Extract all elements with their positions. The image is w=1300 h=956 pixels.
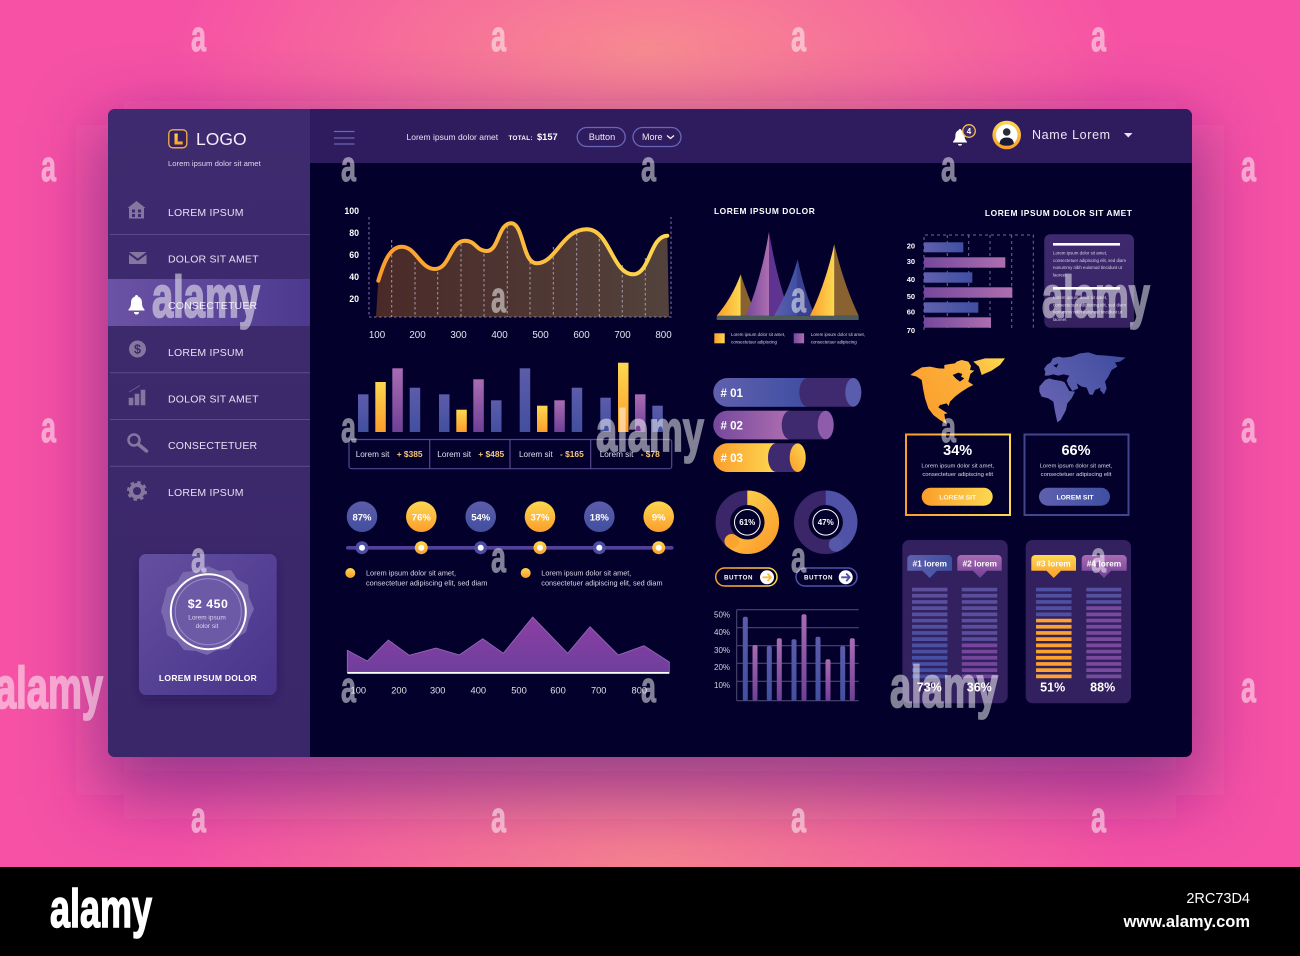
sidebar navigation: LOREM IPSUM [168,207,244,219]
percentage circles: 37% [530,512,550,524]
dashboard window [108,109,1192,757]
badge seal [161,566,254,655]
values table: - $165 [560,449,584,459]
watermarks: a [1241,403,1256,452]
watermarks: a [1091,533,1106,582]
horizontal bar chart: 50 [907,292,915,301]
percentage circles: 76% [412,512,431,524]
footer band: www.alamy.com [1122,913,1250,931]
x axis labels [369,330,672,341]
meter card left: 73% [917,680,942,694]
map: north america [910,358,1005,424]
watermarks: a [491,12,506,61]
watermarks: a [41,142,56,191]
column chart: 10% [714,681,730,690]
watermarks: a [791,793,806,842]
tag 3: #3 lorem [1036,558,1071,568]
donut chart 47% [801,498,850,552]
stat box 34%: LOREM SIT [939,494,977,501]
sidebar logo: LOGO [196,129,247,149]
icon: bar chart [129,386,145,405]
area chart: 300 [430,686,445,696]
x axis labels: 100 [369,330,386,341]
top bar [334,121,1132,149]
x axis labels: 500 [532,330,549,341]
y axis labels: 20 [349,294,359,304]
horizontal bar chart: 60 [907,308,915,317]
watermarks: a [791,12,806,61]
tag 1 [907,555,952,578]
cylinder bars [713,378,861,472]
meter card left [902,540,1008,703]
button [577,128,625,146]
stat box 34% [906,434,1010,515]
promo card [139,554,277,699]
watermarks: a [341,663,356,712]
donut chart 47%: 47% [818,518,834,527]
text card: laoreet [1053,272,1067,278]
tag 4: #4 lorem [1087,558,1121,568]
horizontal bar chart [907,235,1033,335]
y axis labels [344,206,359,304]
icon: search [128,434,146,451]
values table: + $485 [478,449,504,459]
watermarks: alamy [1042,265,1150,330]
timeline nodes [356,541,665,554]
icon: bell [128,295,144,314]
sidebar navigation [108,201,310,500]
triangle legend: consectetuer adipiscing [811,340,857,344]
stat box 34%: 34% [943,443,972,459]
watermarks: a [191,793,206,842]
meter card right [1026,540,1131,703]
cylinder 01: # 01 [720,388,743,400]
watermarks: a [941,403,956,452]
text card: consectetuer adipiscing elit, sed diam [1053,258,1126,263]
x axis labels: 300 [450,330,467,341]
heading: lorem ipsum dolor: LOREM IPSUM DOLOR [714,206,815,216]
notification bell [953,125,975,146]
y axis labels: 40 [349,272,359,282]
text card: laoreet [1053,317,1067,322]
x axis labels: 700 [614,330,631,341]
area chart: 600 [550,686,566,696]
percentage circles: 18% [590,512,609,524]
watermarks: alamy [596,399,704,464]
watermarks: a [491,793,506,842]
top bar: Lorem ipsum dolor amet [406,132,499,142]
timeline [345,501,674,588]
notification bell: 4 [967,127,972,136]
line chart [344,206,672,341]
icon: house [128,201,146,218]
sidebar navigation: LOREM IPSUM [168,487,244,499]
y axis labels: 100 [344,206,359,216]
button yellow: BUTTON [724,574,753,582]
watermarks: a [41,403,56,452]
area chart: 100 [351,686,366,696]
percentage circles: 54% [471,512,491,524]
top bar: Name Lorem [1032,128,1111,142]
triangle legend: Lorem ipsum dolor sit amet, [731,332,785,337]
meter 2 [962,588,997,678]
triangle legend: Lorem ipsum dolor sit amet, [811,332,865,337]
grouped bar chart [349,363,672,469]
triangle legend: consectetuer adipiscing [731,340,777,344]
watermarks: a [191,533,206,582]
text card: nonummy nibh euismod tincidunt ut [1053,265,1123,270]
button yellow [716,568,777,586]
stat box 66% [1024,434,1128,515]
map: europe africa asia [1039,352,1126,422]
timeline legend [345,568,663,588]
donut chart 61% [723,498,772,548]
area chart: 400 [471,686,486,696]
stat box 34%: Lorem ipsum dolor sit amet, [921,464,994,470]
watermarks: a [341,142,356,191]
dropdown arrow [1124,133,1132,138]
sidebar navigation: CONSECTETUER [168,300,258,312]
footer band: 2RC73D4 [1186,891,1250,907]
values table: Lorem sit [356,450,390,459]
watermarks: a [1241,663,1256,712]
timeline legend: consectetuer adipiscing elit, sed diam [541,578,663,588]
icon: dollar: $ [134,342,141,356]
meter 4 [1086,588,1121,678]
stat box 66%: Lorem ipsum dolor sit amet, [1040,464,1113,470]
sidebar navigation: CONSECTETUER [168,440,258,452]
more button: More [642,132,663,142]
meter card right: 51% [1040,680,1065,694]
values table: Lorem sit [437,450,472,459]
button blue [796,568,857,586]
column chart: 20% [714,663,730,672]
footer band: alamy [50,879,152,939]
values table [349,440,672,469]
horizontal bar chart: 40 [907,275,915,284]
text card: consectetuer adipiscing elit, sed diam [1053,302,1126,308]
area chart: 200 [391,686,407,696]
tag 3 [1031,555,1076,578]
text card: Lorem ipsum dolor sit amet, [1053,295,1107,300]
watermarks: a [341,403,356,452]
triangle chart [714,232,865,344]
x axis labels: 200 [409,330,426,341]
y axis labels: 80 [349,228,359,238]
footer band [0,867,1300,956]
watermarks: a [491,533,506,582]
icon: gear [128,482,146,500]
triangle legend [714,332,865,344]
watermarks: a [491,273,506,322]
y axis labels: 60 [349,250,359,260]
watermarks: a [191,12,206,61]
text card: nonummy nibh euismod tincidunt ut [1053,310,1123,314]
watermarks: a [1091,12,1106,61]
sidebar navigation: DOLOR SIT AMET [168,254,259,266]
column chart: 40% [714,628,730,637]
tag 1: #1 lorem [912,558,947,568]
cylinder 03: # 03 [720,453,743,465]
text card [1044,234,1134,328]
watermarks: a [1241,142,1256,191]
badge seal: $2 450 [188,597,228,611]
badge seal: dolor sit [196,623,219,630]
column chart: 50% [714,610,730,620]
watermarks: alamy [152,265,260,330]
donut chart 61%: 61% [739,518,755,527]
x axis labels: 800 [655,330,672,341]
area chart: 500 [511,686,527,696]
horizontal bar chart: 70 [907,326,915,335]
top bar: $157 [537,132,558,142]
sidebar navigation: LOREM IPSUM [168,347,244,359]
timeline legend: Lorem ipsum dolor sit amet, [366,568,456,578]
column chart [714,610,859,701]
meter card right: 88% [1090,680,1115,694]
percentage circles: 9% [652,512,666,524]
icon: mail [129,252,146,264]
area chart: 700 [591,686,606,696]
area chart: 800 [632,686,647,696]
meter 3 [1036,588,1072,678]
timeline legend: Lorem ipsum dolor sit amet, [541,568,631,578]
watermarks: a [941,142,956,191]
cylinder 03 [713,443,806,472]
heading: lorem ipsum dolor sit amet: LOREM IPSUM DOLOR SIT AMET [985,208,1133,218]
watermarks: a [791,533,806,582]
column chart: 30% [714,646,730,655]
promo card: LOREM IPSUM DOLOR [159,673,257,683]
stat box 34%: consectetuer adipiscing elit [922,472,993,478]
watermarks: a [1091,793,1106,842]
button: Button [589,132,615,142]
x axis labels: 600 [573,330,590,341]
horizontal bar chart: 30 [907,257,915,266]
meter card left: 36% [967,680,992,694]
watermarks: a [641,142,656,191]
stat box 66%: consectetuer adipiscing elit [1041,472,1112,478]
sidebar navigation: DOLOR SIT AMET [168,394,259,406]
hamburger menu [334,132,354,144]
area chart [347,617,669,696]
x axis labels: 400 [491,330,508,341]
button blue: BUTTON [804,574,833,582]
percentage circles: 87% [352,512,372,524]
avatar [992,121,1021,149]
stat box 66%: LOREM SIT [1056,494,1094,501]
values table: + $385 [397,449,423,459]
sidebar logo: Lorem ipsum dolor sit amet [168,159,262,168]
timeline legend: consectetuer adipiscing elit, sed diam [366,578,487,588]
more button [633,128,681,146]
watermarks: a [641,663,656,712]
top bar: TOTAL: [508,135,533,142]
horizontal bar chart: 20 [907,242,915,250]
values table: Lorem sit [600,450,634,459]
percentage circles [347,501,674,532]
cylinder 02: # 02 [720,420,743,432]
sidebar logo [168,129,262,168]
meter 1 [912,588,947,678]
tag 2 [957,555,1002,578]
tag 2: #2 lorem [962,558,997,568]
icon: dollar [129,340,146,358]
watermarks: alamy [890,655,998,720]
tag 4 [1082,555,1127,578]
values table: Lorem sit [519,450,553,459]
watermarks: a [791,273,806,322]
cylinder 01 [713,378,861,407]
cylinder 02 [713,411,834,439]
badge seal: Lorem ipsum [188,614,226,622]
stat box 66%: 66% [1061,443,1091,459]
values table: - $78 [641,449,660,459]
text card: Lorem ipsum dolor sit amet, [1053,250,1107,256]
